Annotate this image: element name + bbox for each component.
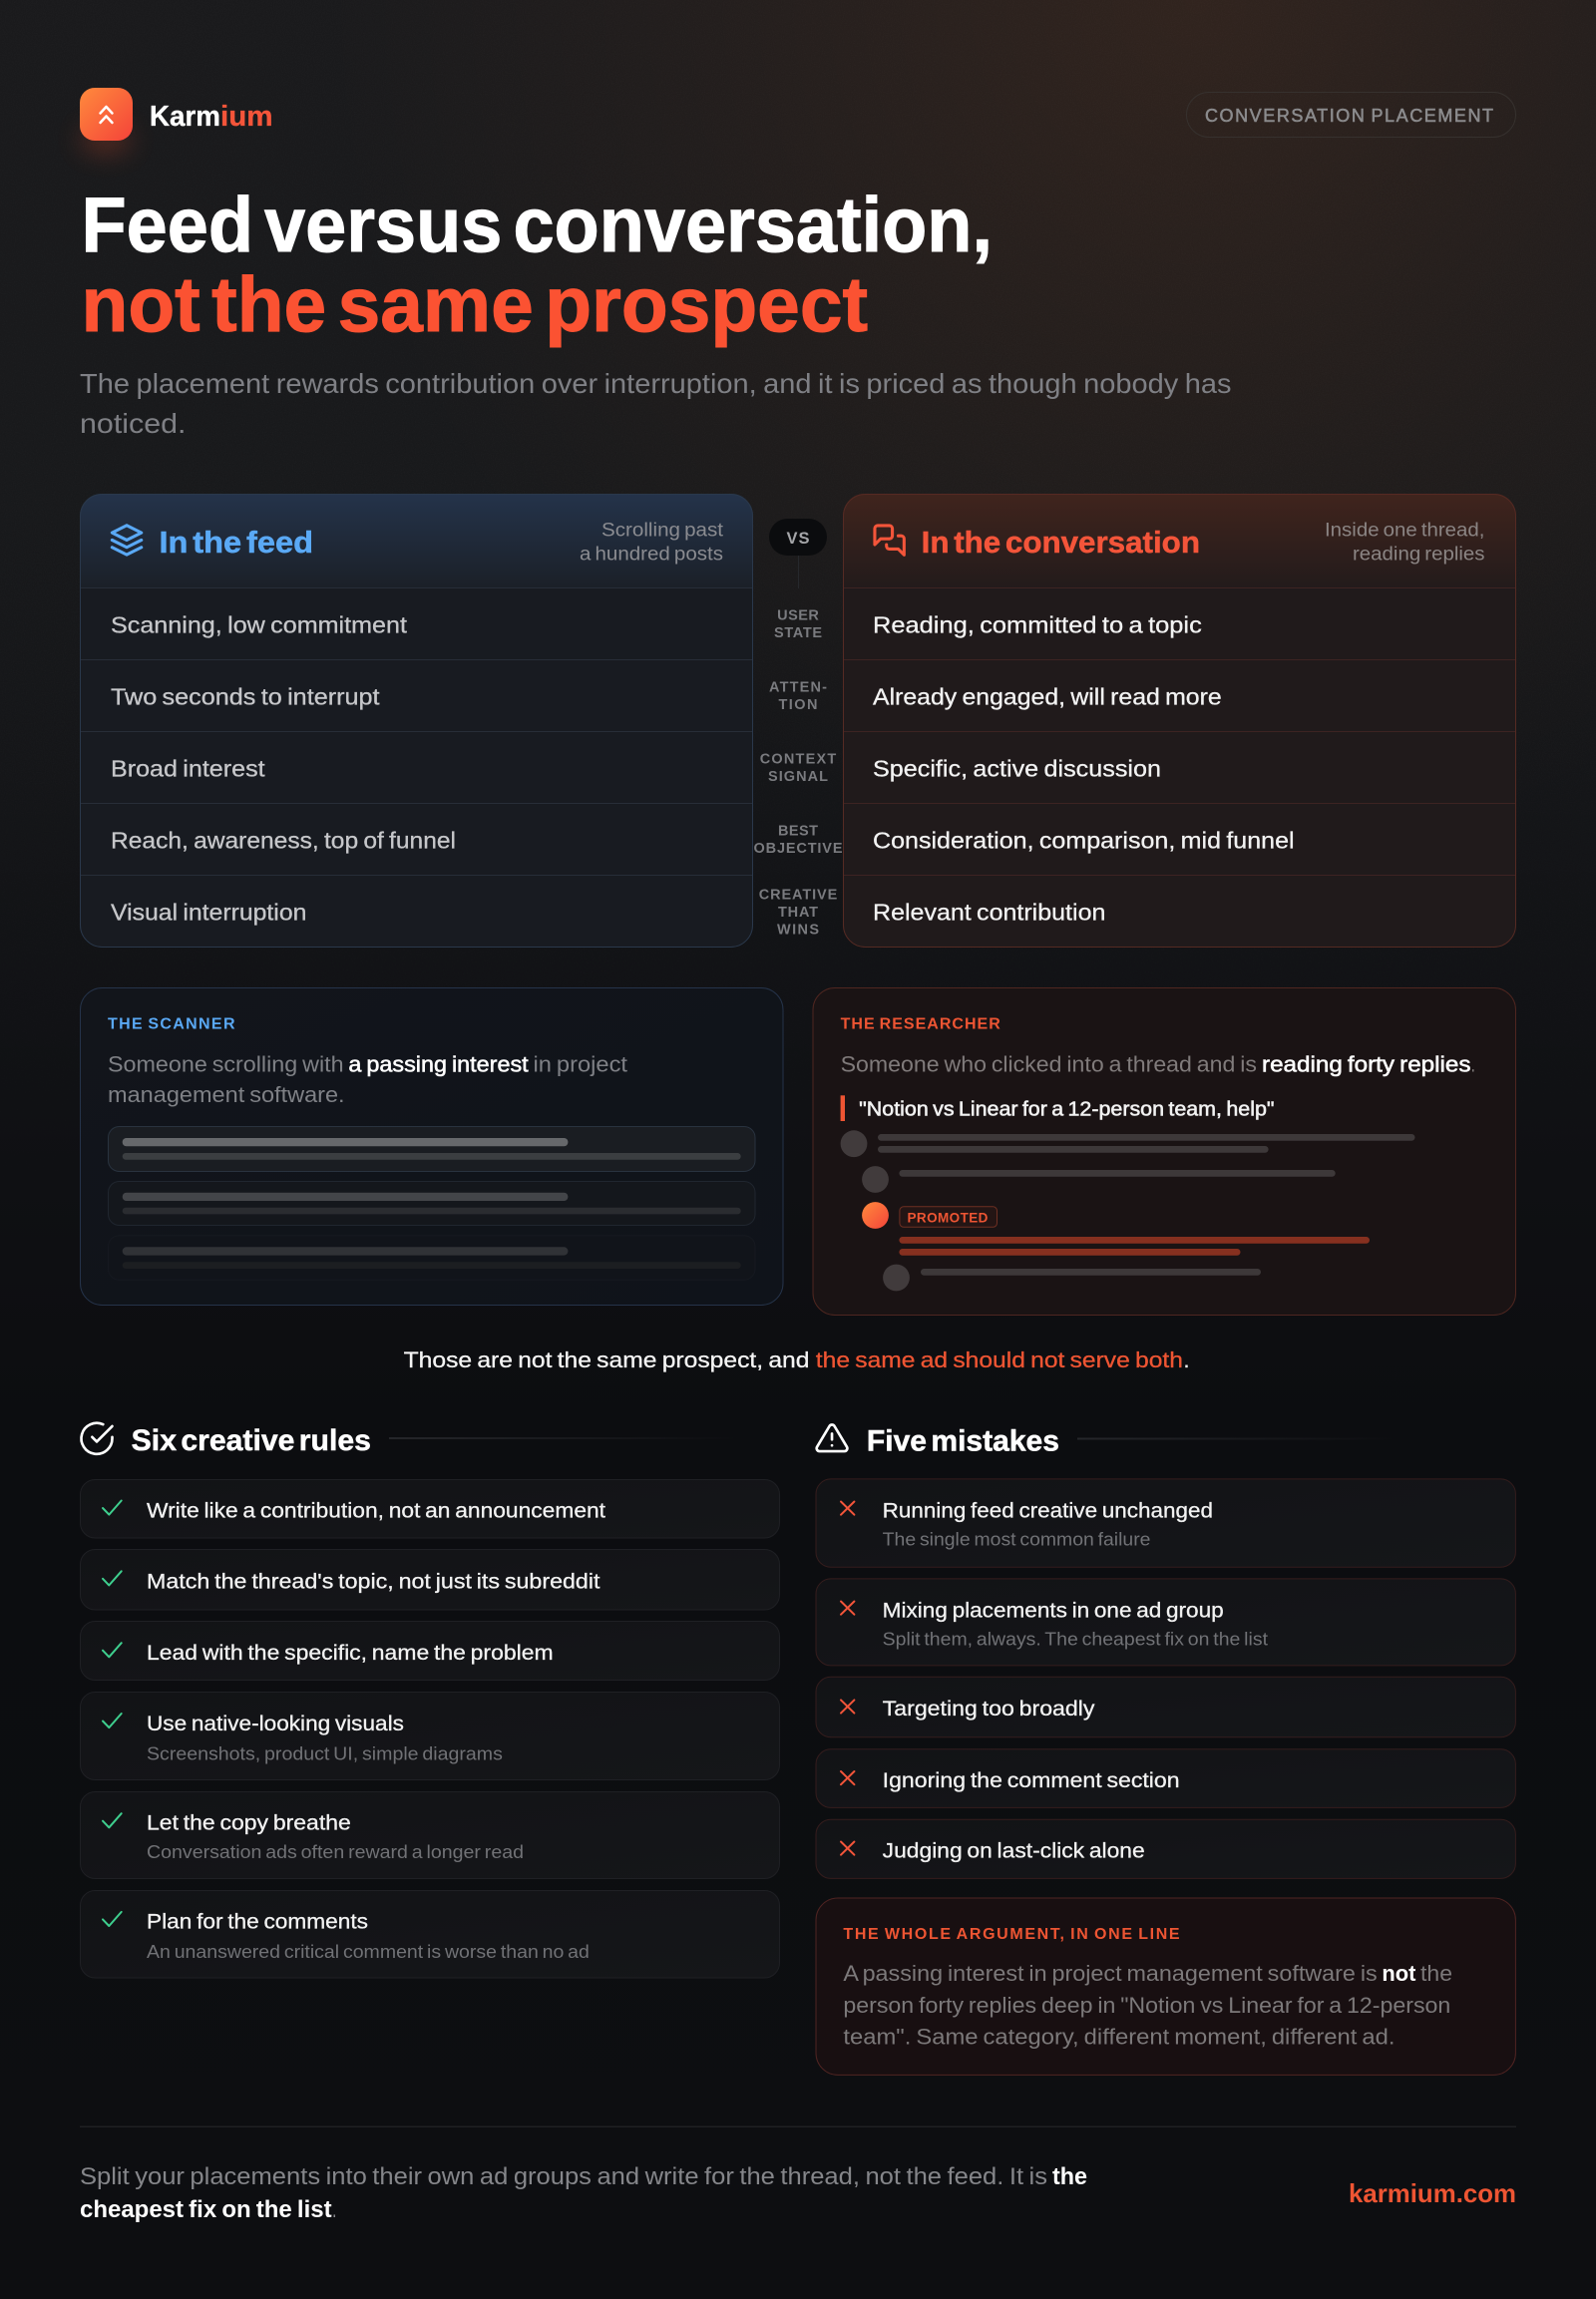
researcher description: reading forty replies — [1262, 1051, 1470, 1076]
key statement: . — [1183, 1347, 1189, 1372]
rule 4: Use native-looking visuals — [147, 1712, 404, 1735]
section: five mistakes — [816, 1424, 1515, 2075]
row labels: USER — [777, 608, 819, 624]
rule 5: Conversation ads often reward a longer read — [147, 1841, 524, 1862]
brand name — [150, 101, 273, 133]
brand name: ium — [220, 101, 273, 133]
mistake 2: Split them, always. The cheapest fix on the list — [883, 1629, 1268, 1650]
row labels: STATE — [774, 625, 822, 641]
panel: the scanner — [80, 987, 783, 1305]
vs badge: VS — [786, 530, 810, 548]
row labels: WINS — [777, 922, 819, 938]
conversation descriptor: reading replies — [1353, 545, 1484, 565]
mistake 5 — [816, 1819, 1515, 1878]
rule 2: Match the thread's topic, not just its subreddit — [147, 1570, 600, 1594]
conversation rows: Specific, active discussion — [873, 755, 1161, 781]
brand logo — [80, 88, 273, 154]
mistake 2: Mixing placements in one ad group — [883, 1598, 1224, 1622]
footer message: cheapest fix on the list — [80, 2196, 332, 2223]
rule 2 — [80, 1550, 780, 1610]
researcher label: THE RESEARCHER — [841, 1016, 1000, 1033]
feed rows — [111, 611, 456, 926]
mistake 1: The single most common failure — [883, 1529, 1151, 1550]
mistake 3: Targeting too broadly — [883, 1697, 1095, 1721]
callout body: the — [1420, 1961, 1452, 1986]
mistake 3 — [816, 1677, 1515, 1737]
feed rows: Two seconds to interrupt — [111, 684, 380, 710]
panel: the researcher — [813, 987, 1516, 1315]
rule 5 — [80, 1791, 780, 1879]
rule 4: Screenshots, product UI, simple diagrams — [147, 1742, 503, 1763]
researcher description: Someone who clicked into a thread and is — [841, 1051, 1257, 1076]
title — [82, 181, 993, 348]
conversation rows: Relevant contribution — [873, 900, 1105, 926]
illustration: comment thread — [841, 1130, 1414, 1291]
icon: logo mark with double chevron — [80, 88, 133, 141]
icon: check circle — [82, 1423, 112, 1454]
feed rows: Broad interest — [111, 755, 265, 781]
rule 6: Plan for the comments — [147, 1909, 368, 1933]
conversation rows — [873, 611, 1295, 926]
researcher description: . — [1470, 1051, 1475, 1076]
feed descriptor: a hundred posts — [580, 545, 723, 565]
website: karmium.com — [1349, 2178, 1516, 2208]
key statement: Those are not the same prospect, and — [404, 1347, 810, 1372]
mistake 1: Running feed creative unchanged — [883, 1498, 1213, 1522]
footer message: . — [332, 2196, 337, 2223]
conversation rows: Consideration, comparison, mid funnel — [873, 828, 1295, 854]
callout body: person forty replies deep in "Notion vs Linear for a 12-person — [843, 1993, 1450, 2018]
scanner description: in project — [533, 1051, 628, 1076]
rule 3 — [80, 1622, 780, 1680]
footer divider and text — [80, 2126, 1516, 2223]
row labels: CONTEXT — [760, 752, 836, 768]
footer message: Split your placements into their own ad groups and write for the thread, not the feed. It is — [80, 2163, 1047, 2190]
scanner description — [108, 1051, 628, 1107]
row labels: TION — [778, 697, 818, 713]
researcher description — [841, 1051, 1475, 1076]
promoted reply: PROMOTED — [908, 1210, 989, 1225]
row labels: ATTEN- — [769, 680, 827, 696]
icon: chat bubbles — [875, 526, 904, 555]
footer message: the — [1052, 2163, 1087, 2190]
rule 1 — [80, 1480, 780, 1538]
row labels — [754, 608, 843, 938]
scanner description: Someone scrolling with — [108, 1051, 344, 1076]
illustration: fading feed cards — [108, 1127, 755, 1280]
key statement: the same ad should not serve both — [816, 1347, 1183, 1372]
conversation heading: In the conversation — [922, 525, 1200, 560]
rule 1: Write like a contribution, not an announcement — [147, 1499, 605, 1523]
feed descriptor — [580, 521, 724, 565]
callout: the whole argument — [816, 1898, 1515, 2075]
heading: six creative rules — [82, 1423, 738, 1457]
panel: in the feed — [80, 494, 753, 948]
row labels: CREATIVE — [759, 888, 838, 904]
icon: warning triangle — [817, 1424, 847, 1451]
mistake 4: Ignoring the comment section — [883, 1768, 1180, 1792]
feed rows: Scanning, low commitment — [111, 611, 408, 637]
subtitle — [80, 368, 1231, 439]
conversation descriptor — [1325, 521, 1484, 565]
thread quote: "Notion vs Linear for a 12-person team, help" — [859, 1098, 1275, 1120]
rule 3: Lead with the specific, name the problem — [147, 1641, 554, 1665]
mistake 4 — [816, 1749, 1515, 1807]
feed rows: Reach, awareness, top of funnel — [111, 828, 456, 854]
feed descriptor: Scrolling past — [601, 521, 724, 541]
subtitle: The placement rewards contribution over interruption, and it is priced as though nobody has — [80, 368, 1231, 399]
callout body: A passing interest in project management software is — [843, 1961, 1378, 1986]
icon: layers — [112, 526, 142, 555]
conversation descriptor: Inside one thread, — [1325, 521, 1484, 541]
row labels: THAT — [778, 905, 818, 921]
panel: in the conversation — [843, 494, 1516, 948]
feed rows: Visual interruption — [111, 900, 306, 926]
callout body — [843, 1961, 1452, 2049]
brand name: Karm — [150, 101, 220, 133]
vs badge — [769, 519, 827, 588]
callout body: not — [1382, 1961, 1416, 1986]
promoted reply — [862, 1202, 1370, 1256]
footer message — [80, 2163, 1087, 2223]
topic tag pill: CONVERSATION PLACEMENT — [1205, 106, 1493, 126]
mistake 5: Judging on last-click alone — [883, 1839, 1145, 1863]
key statement — [404, 1347, 1190, 1372]
rule 6 — [80, 1891, 780, 1978]
mistake 2 — [816, 1579, 1515, 1666]
mistake 1 — [816, 1479, 1515, 1567]
callout: the whole argument: THE WHOLE ARGUMENT, IN ONE LINE — [843, 1926, 1180, 1943]
vs badge and row labels — [754, 519, 843, 938]
row labels: SIGNAL — [768, 769, 828, 785]
conversation rows: Reading, committed to a topic — [873, 611, 1202, 637]
conversation rows: Already engaged, will read more — [873, 684, 1222, 710]
callout body: team". Same category, different moment, different ad. — [843, 2025, 1395, 2049]
subtitle: noticed. — [80, 408, 186, 439]
scanner description: a passing interest — [348, 1051, 529, 1076]
section: six creative rules — [80, 1423, 780, 1978]
heading: five mistakes: Five mistakes — [867, 1424, 1059, 1458]
title: Feed versus conversation, — [82, 181, 993, 268]
title: not the same prospect — [82, 260, 868, 348]
row labels: BEST — [778, 824, 818, 840]
scanner label: THE SCANNER — [108, 1016, 235, 1033]
feed heading: In the feed — [160, 525, 313, 560]
row labels: OBJECTIVE — [754, 841, 843, 857]
rule 4 — [80, 1692, 780, 1779]
rule 5: Let the copy breathe — [147, 1811, 351, 1835]
topic tag pill — [1187, 92, 1516, 138]
rule 6: An unanswered critical comment is worse than no ad — [147, 1941, 590, 1962]
scanner description: management software. — [108, 1082, 345, 1107]
heading: six creative rules: Six creative rules — [132, 1424, 371, 1457]
page background — [0, 0, 1596, 910]
heading: five mistakes — [817, 1424, 1396, 1458]
